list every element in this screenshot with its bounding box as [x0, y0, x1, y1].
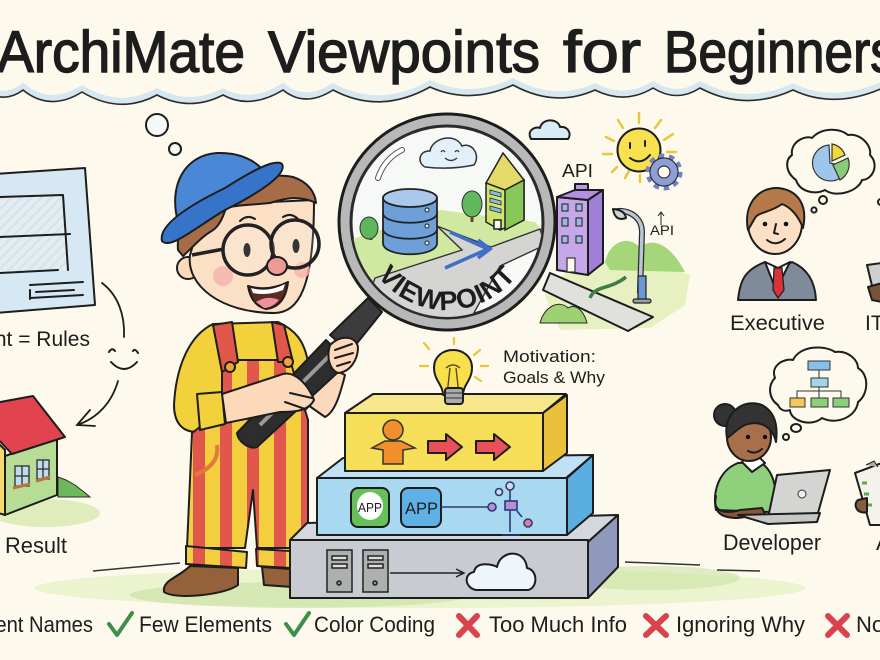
hat: [162, 153, 283, 243]
label: viewpoint on lens: VIEWPOINT: [382, 263, 512, 310]
lens small tree: [462, 191, 482, 222]
right hand: [328, 338, 358, 373]
sun: [603, 113, 676, 182]
item: ignoring why: Ignoring Why: [676, 612, 805, 637]
title: for: [563, 20, 641, 85]
label: API: API: [562, 161, 593, 181]
item: too much info: Too Much Info: [489, 612, 627, 637]
cloud small: [530, 120, 570, 139]
label: motivation: Goals & Why: [503, 368, 606, 387]
title: ArchiMate: [0, 20, 245, 85]
lens database: [383, 189, 437, 254]
executive persona: [738, 188, 816, 300]
app blue: [401, 488, 441, 527]
lens glare inner: [378, 150, 402, 178]
thought cloud: flow chart: [770, 347, 866, 440]
lens road: [373, 226, 542, 317]
label: executive: Executive: [730, 312, 825, 335]
panel: blueprint: [0, 168, 95, 313]
label: API small with arrow: API: [650, 222, 674, 238]
label: motivation: Motivation:: [503, 347, 596, 366]
arrow to cloud: [390, 569, 464, 577]
head: [177, 176, 319, 313]
purple building: [557, 184, 603, 275]
cuffs and shoes: [164, 546, 292, 596]
app green: [351, 488, 389, 527]
shirt: [174, 322, 310, 432]
road: [543, 273, 653, 331]
icon: check: [109, 613, 132, 635]
right side scenery: [530, 113, 690, 331]
character: boy: [162, 153, 382, 596]
label: motivation: [503, 347, 606, 387]
thought bubbles: [146, 114, 181, 155]
servers: [327, 550, 388, 592]
layer: application: [317, 455, 593, 535]
lens scene ground: [350, 210, 545, 300]
IT persona, clipped: [867, 199, 880, 302]
house: [0, 396, 100, 527]
grass patch: [545, 260, 690, 330]
developer persona: [714, 403, 830, 524]
cloud: [467, 554, 535, 590]
item: color coding: Color Coding: [314, 612, 435, 637]
arrows: [428, 434, 462, 460]
lens glare: [378, 150, 402, 178]
right forearm: [308, 365, 345, 417]
sleeve cuff: [197, 392, 225, 430]
architect persona clipboard, clipped: [855, 461, 880, 525]
app green: APP: [358, 500, 382, 515]
lens cloud with smile: [420, 138, 476, 168]
bushes: [605, 241, 685, 272]
ground grass: [35, 562, 805, 608]
label: result: Result: [5, 533, 67, 558]
connection diagram: [441, 482, 532, 535]
overalls: [187, 322, 308, 548]
lens blue arrow: [445, 232, 490, 268]
layer: motivation: [345, 394, 567, 471]
magnifier handle: [237, 298, 382, 448]
gear: [649, 157, 679, 187]
thought cloud: pie chart: [787, 130, 875, 213]
item: few elements: Few Elements: [139, 612, 272, 637]
layered stack: [290, 394, 618, 598]
icon: cross: [459, 616, 477, 635]
arrow and smile: [77, 283, 138, 426]
left forearm and hand: [222, 374, 314, 423]
lens tree: [360, 217, 378, 240]
icon: cross: [828, 616, 847, 635]
label: API small with arrow: [650, 212, 674, 238]
lens building: [486, 153, 524, 230]
green arrow: [590, 277, 626, 298]
street lamp: [613, 209, 651, 303]
footer: checklist: [0, 612, 880, 637]
magnifier lens: [338, 112, 556, 332]
icon: lightbulb: [420, 338, 488, 404]
bush lower: [540, 304, 587, 323]
app blue: APP: [405, 499, 438, 518]
actor icon: [372, 420, 415, 464]
title: Viewpoints: [268, 20, 540, 85]
icon: check: [286, 613, 309, 635]
icon: cross: [646, 616, 666, 635]
layer: technology: [290, 515, 618, 598]
label: developer: Developer: [723, 530, 821, 555]
cloud banner edge: [0, 82, 880, 104]
